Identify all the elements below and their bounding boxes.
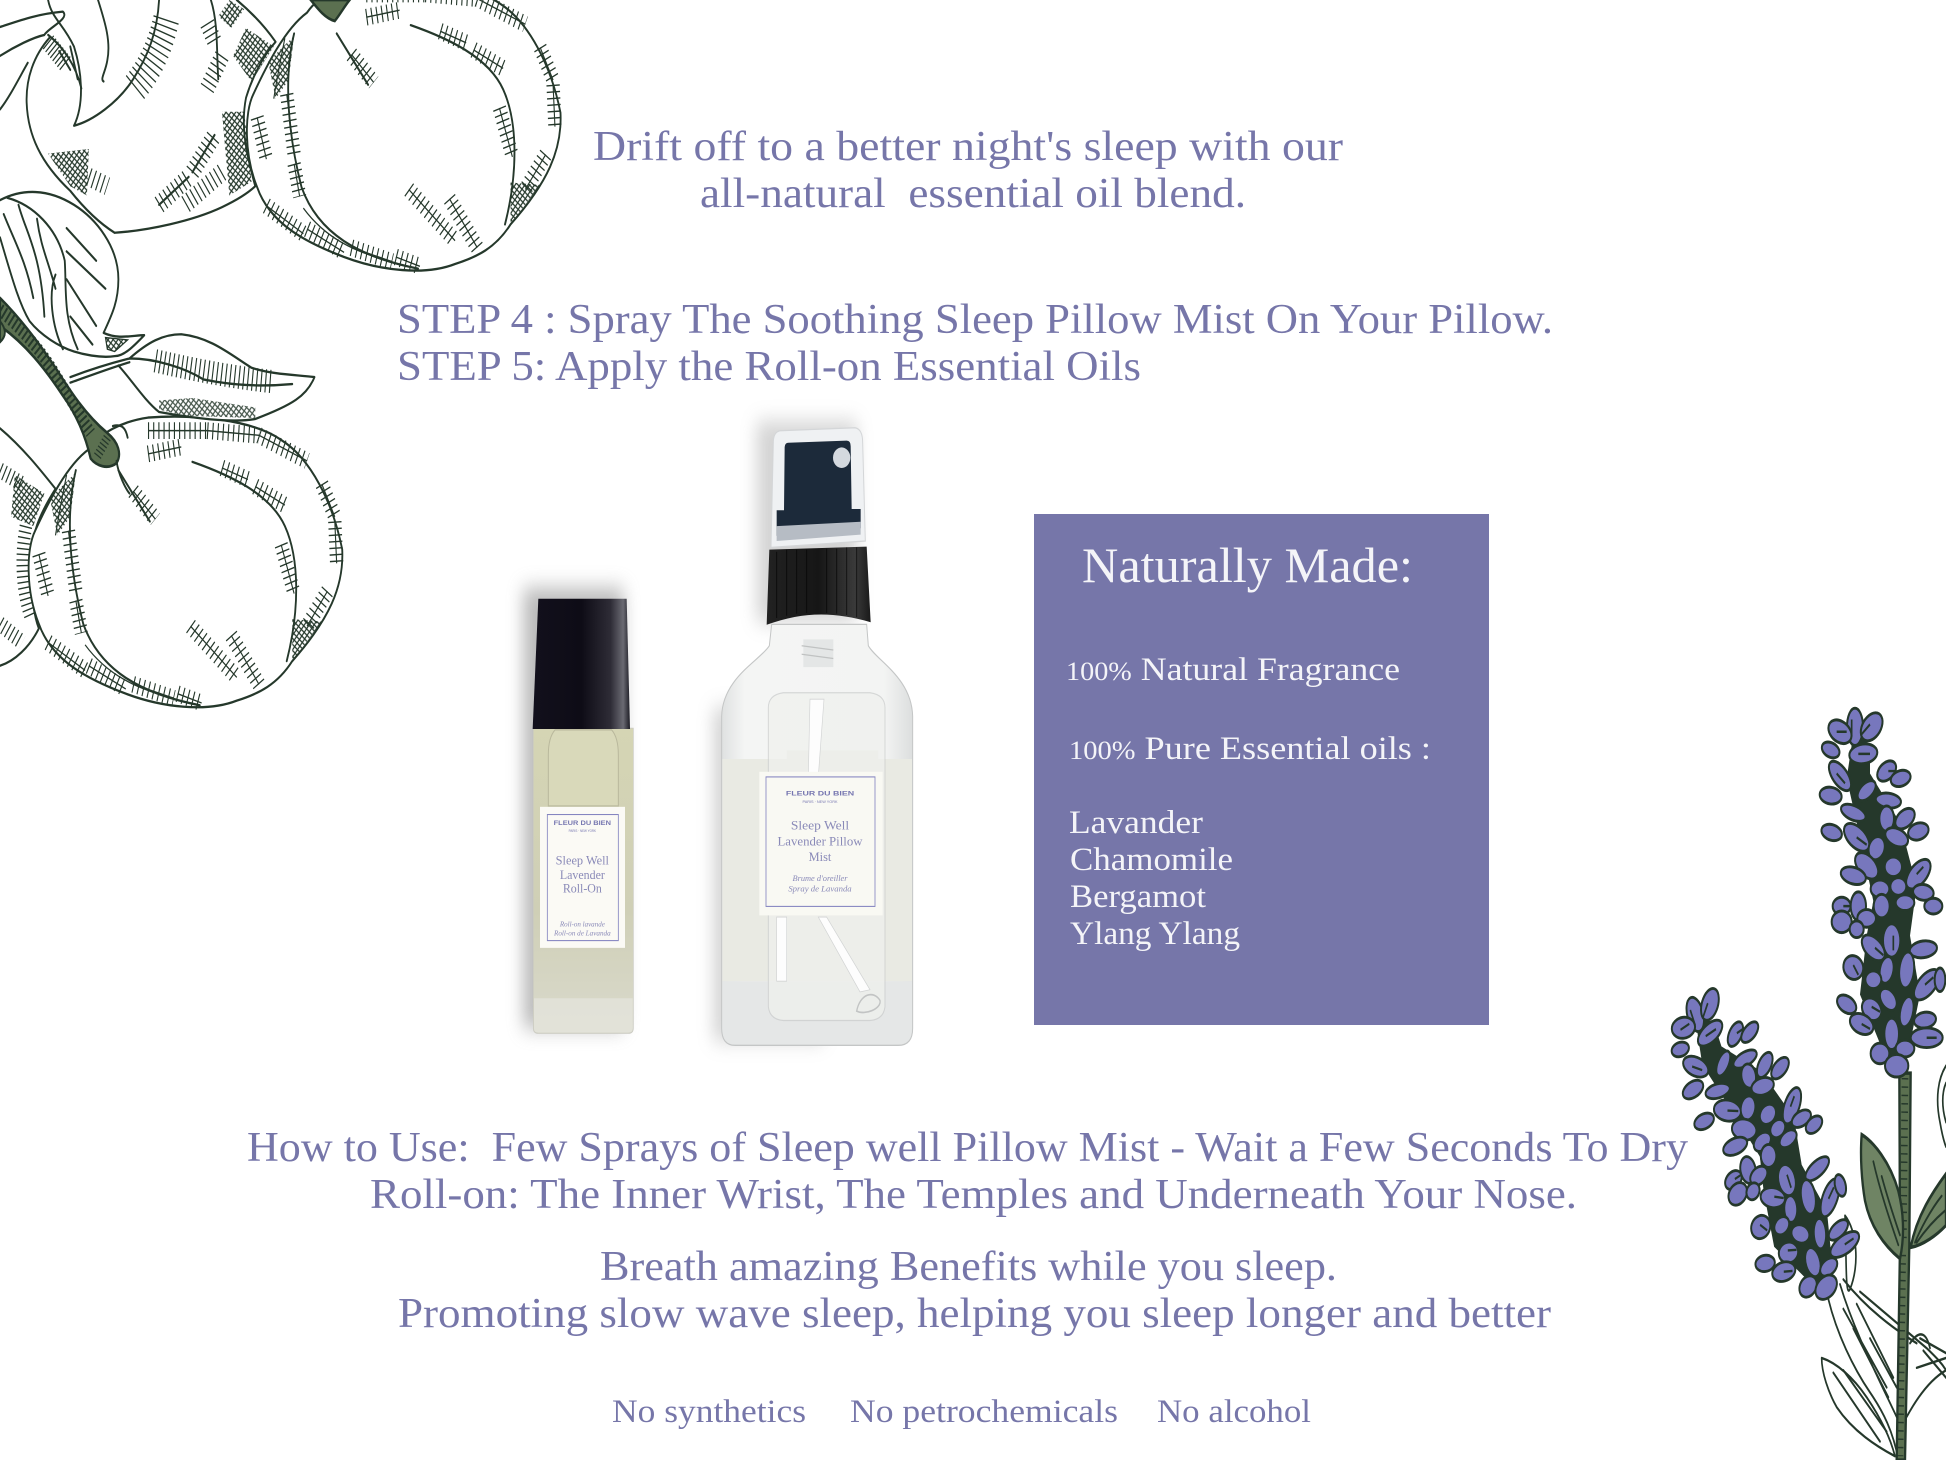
steps text [397,297,1553,390]
illustration: lavender [1658,707,1946,1460]
panel heading: Naturally Made: [1082,537,1413,593]
flower spike small [1658,942,1872,1344]
roll-on roller [548,730,618,806]
roll-on label: Roll-on de Lavanda [553,930,611,938]
steps text: STEP 4 : Spray The Soothing Sleep Pillow Mist On Your Pillow. [397,297,1553,343]
steps text: STEP 5: Apply the Roll-on Essential Oils [397,344,1141,390]
mist label: PARIS · NEW YORK [802,800,837,804]
intro text [593,124,1343,217]
intro text: Drift off to a better night's sleep with our [593,124,1343,170]
roll-on label: PARIS · NEW YORK [569,829,596,833]
main stem [1897,1073,1911,1460]
mist glass body [722,624,913,1045]
oil list [1069,805,1240,952]
product: pillow mist bottle [722,428,913,1045]
mist pump head [777,441,861,536]
mist label: Brume d'oreiller [792,874,848,883]
free-from claims [612,1394,1311,1430]
mist label: Lavender Pillow [777,836,863,849]
free-from claims: No synthetics [612,1394,806,1430]
branch stem [0,298,129,493]
intro text: all-natural essential oil blend. [700,171,1246,217]
roll-on label: Roll-On [563,883,602,896]
benefits text: Breath amazing Benefits while you sleep. [600,1244,1337,1290]
leaf left [0,192,144,357]
pure oils line: 100% Pure Essential oils : [1069,731,1431,767]
mist black collar [767,547,871,625]
product: roll-on bottle [533,599,633,1033]
roll-on label: Roll-on lavande [559,921,605,929]
mist label: Spray de Lavanda [788,885,852,894]
roll-on label: FLEUR DU BIEN [554,821,611,827]
fruit upper left with leaf [0,0,276,233]
oil list: Chamomile [1070,842,1233,878]
mist dip tube [777,699,870,992]
flower spike large [1819,707,1945,1077]
mist label: Sleep Well [791,819,849,833]
product: bottle shadows [523,421,857,1041]
roll-on label [540,807,625,948]
how to use text: How to Use: Few Sprays of Sleep well Pillow Mist - Wait a Few Seconds To Dry [247,1125,1688,1171]
roll-on label: Sleep Well [556,854,609,868]
panel: naturally made [1034,514,1489,1025]
free-from claims: No alcohol [1157,1394,1311,1430]
mist label: Mist [809,851,832,864]
benefits text: Promoting slow wave sleep, helping you sleep longer and better [398,1291,1551,1337]
oil list: Bergamot [1070,879,1206,915]
cropped fruit lower left [0,428,55,666]
roll-on cap [533,599,630,729]
lower outlined leaves [1822,1216,1946,1460]
oil list: Lavander [1069,805,1203,841]
free-from claims: No petrochemicals [850,1394,1118,1430]
roll-on label: Lavender [560,869,605,882]
leaf right green [1911,1174,1946,1247]
mist label [759,772,883,915]
mist label: FLEUR DU BIEN [786,790,855,798]
leaf right [70,334,314,421]
outlined leaf edge [1938,1066,1946,1147]
oil list: Ylang Ylang [1070,916,1240,952]
benefits text [398,1244,1551,1337]
fruit lower [29,417,342,707]
roll-on glass body [533,728,633,1033]
top stem [311,0,350,21]
leaf left green [1861,1134,1903,1259]
mist clear overcap [771,428,865,547]
how to use text: Roll-on: The Inner Wrist, The Temples and Underneath Your Nose. [370,1172,1577,1218]
mist inner fill [722,750,912,981]
fruit upper right [247,0,561,271]
natural fragrance line: 100% Natural Fragrance [1066,652,1400,688]
illustration: peach branch [0,0,561,707]
how to use text [247,1125,1688,1218]
